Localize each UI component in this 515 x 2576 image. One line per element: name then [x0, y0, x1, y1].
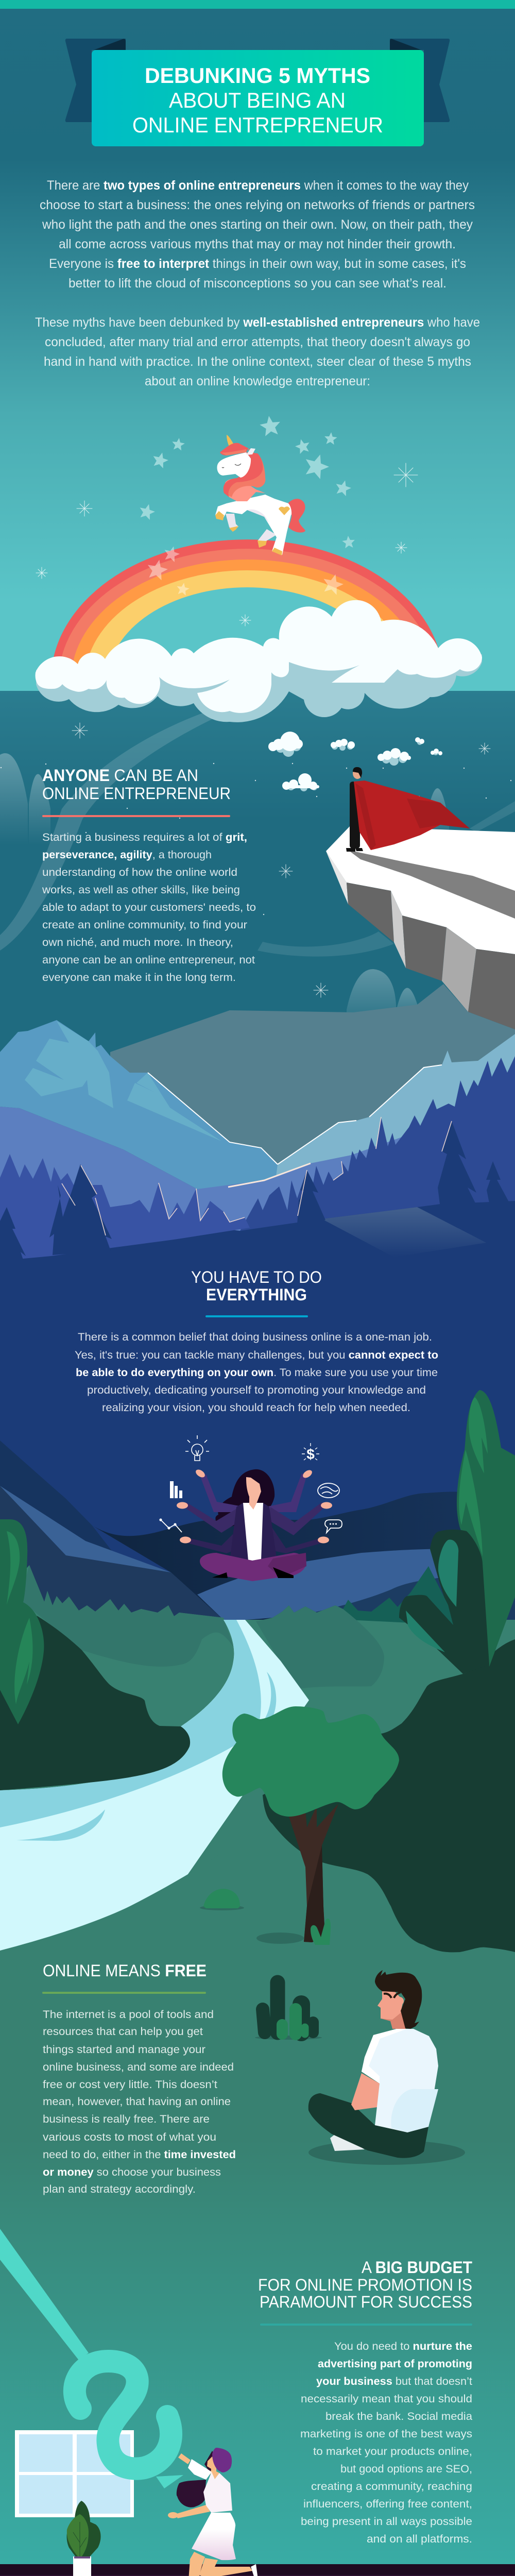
body text: Yes, it's true: you can tackle many challenges, but you cannot expect to	[75, 1349, 438, 1361]
intro text block: These myths have been debunked by well-established entrepreneurs who have	[35, 315, 480, 330]
heading: FOR ONLINE PROMOTION IS	[258, 2276, 472, 2294]
body text: There is a common belief that doing business online is a one-man job.	[78, 1331, 432, 1343]
section 1 text: anyone can be an online entrepreneur	[42, 766, 256, 984]
body text: but good options are SEO,	[340, 2463, 472, 2475]
body text: create an online community, to find your	[42, 919, 247, 931]
body text: You do need to nurture the	[334, 2341, 472, 2352]
title text: ABOUT BEING AN	[169, 88, 346, 112]
heading: ONLINE ENTREPRENEUR	[42, 784, 231, 803]
heading: YOU HAVE TO DO	[191, 1268, 322, 1286]
running woman	[168, 2448, 259, 2576]
cliff with hero	[326, 767, 515, 1029]
body text: works, as well as other skills, like being	[42, 884, 240, 896]
snow glints	[62, 1117, 452, 1235]
title banner	[65, 39, 450, 146]
intro text block: There are two types of online entrepreneurs when it comes to the way they	[47, 178, 469, 193]
top accent bar	[0, 0, 515, 9]
plant: left foliage	[0, 1519, 44, 1724]
mountain range	[0, 1020, 515, 1231]
body text: or money so choose your business	[43, 2166, 221, 2178]
body text: free or cost very little. This doesn’t	[43, 2079, 217, 2091]
body text: mean, however, that having an online	[43, 2096, 231, 2108]
sitting man	[308, 1970, 465, 2165]
main cloud	[35, 600, 482, 722]
hero with cape	[346, 767, 470, 852]
section 2 text: you have to do everything	[75, 1268, 438, 1414]
body text: be able to do everything on your own . To make sure you use your time	[76, 1367, 438, 1379]
body text: advertising part of promoting	[318, 2358, 472, 2370]
heading	[258, 2258, 472, 2311]
night hills	[0, 1440, 515, 1623]
intro text block: choose to start a business: the ones relying on networks of friends or partners	[40, 198, 475, 212]
heading: ONLINE MEANS FREE	[43, 1961, 207, 1980]
title text	[132, 63, 383, 137]
intro text block: about an online knowledge entrepreneur:	[145, 374, 370, 388]
hands	[177, 1468, 332, 1544]
faint rainbow reflection and hills	[0, 710, 515, 1036]
intro text block: better to lift the cloud of misconceptions so you can see what’s real.	[68, 276, 447, 291]
plateau behind mountains	[110, 984, 515, 1170]
body text: able to adapt to your customers' needs, to	[42, 902, 256, 913]
heading: PARAMOUNT FOR SUCCESS	[260, 2293, 472, 2311]
title text: DEBUNKING 5 MYTHS	[145, 63, 370, 88]
intro text block: hand in hand with practice. In the online context, steer clear of these 5 myths	[44, 354, 471, 369]
star dots	[1, 763, 511, 915]
background: navy section	[0, 1206, 515, 1628]
body text: creating a community, reaching	[311, 2481, 472, 2493]
background: lower sky	[0, 691, 515, 1206]
body text: things started and manage your	[43, 2044, 205, 2056]
body text: resources that can help you get	[43, 2026, 203, 2038]
body text: online business, and some are indeed	[43, 2061, 234, 2073]
heading	[191, 1268, 322, 1304]
tree	[222, 1706, 399, 1942]
heading: ANYONE CAN BE AN	[42, 766, 198, 785]
body text: being present in all ways possible	[301, 2516, 472, 2528]
body text: The internet is a pool of tools and	[43, 2009, 214, 2021]
body text: and on all platforms.	[367, 2533, 472, 2545]
meditating woman with icons	[159, 1435, 342, 1581]
section 4 text: big budget	[258, 2258, 472, 2545]
body text	[42, 832, 256, 984]
plant: right foliage	[399, 1390, 515, 1674]
body text: realizing your vision, you should reach for help when needed.	[102, 1402, 410, 1414]
hair	[215, 1469, 274, 1528]
upper arms	[200, 1475, 242, 1512]
body text: productively, dedicating yourself to promoting your knowledge and	[87, 1384, 426, 1396]
middle arms	[184, 1502, 242, 1533]
body text	[300, 2341, 472, 2545]
body text: need to do, either in the time invested	[43, 2149, 236, 2161]
small clouds	[268, 732, 442, 791]
bush: beside man	[255, 1982, 322, 2040]
background: sky gradient	[0, 0, 515, 691]
heading: EVERYTHING	[206, 1285, 307, 1304]
underline	[42, 815, 230, 817]
underline	[42, 1992, 206, 1994]
sky stars	[138, 414, 355, 549]
icon: dollar	[302, 1443, 319, 1462]
sparkles	[36, 463, 490, 1188]
intro text block: all come across various myths that may or may not hinder their growth.	[59, 237, 456, 251]
background: green section	[0, 1620, 515, 2565]
body text: break the bank. Social media	[325, 2411, 472, 2422]
icon: speech bubble	[325, 1520, 342, 1533]
dark forest right	[263, 1639, 515, 1952]
small bushes near tree	[200, 1889, 331, 1945]
body text: various costs to most of what you	[43, 2131, 216, 2143]
body text	[43, 2009, 236, 2195]
icon: brain	[318, 1483, 339, 1498]
body text	[75, 1331, 438, 1414]
intro text block: concluded, after many trial and error attempts, that theory doesn't always go	[45, 335, 470, 349]
rainbow	[51, 539, 443, 680]
body text: everyone can make it in the long term.	[42, 972, 236, 984]
background: dark purple room	[0, 2564, 515, 2576]
intro text block	[35, 178, 480, 388]
intro text block: who light the path and the ones starting on their own. Now, on their path, they	[42, 217, 473, 232]
body text: to market your products online,	[313, 2446, 472, 2458]
body text: plan and strategy accordingly.	[43, 2183, 196, 2195]
body text: own niché, and much more. In theory,	[42, 937, 233, 948]
crossed legs	[200, 1553, 305, 1581]
window	[15, 2430, 134, 2517]
icon: dollar: $	[306, 1446, 315, 1462]
icon: bars	[170, 1481, 182, 1498]
unicorn	[215, 435, 305, 555]
underline	[205, 1315, 308, 1317]
intro text block: Everyone is free to interpret things in their own way, but in some cases, it's	[49, 257, 466, 271]
icon: line chart	[159, 1518, 182, 1532]
section 3 text: online means free	[42, 1961, 236, 2195]
body text: necessarily mean that you should	[301, 2393, 472, 2405]
body text: business is really free. There are	[43, 2113, 210, 2125]
lower arms	[185, 1525, 242, 1553]
title text: ONLINE ENTREPRENEUR	[132, 113, 383, 137]
pine trees	[0, 1121, 511, 1260]
heading: A BIG BUDGET	[362, 2258, 472, 2277]
body text: perseverance, agility , a thorough	[42, 849, 212, 861]
body text: Starting a business requires a lot of grit,	[42, 832, 247, 843]
icon: light bulb	[185, 1435, 209, 1461]
green hills and far treelines	[0, 1565, 453, 1690]
forests	[0, 1056, 515, 1288]
body text: anyone can be an online entrepreneur, not	[42, 954, 255, 966]
body text: marketing is one of the best ways	[300, 2428, 472, 2440]
body text: your business but that doesn’t	[316, 2376, 472, 2387]
potted plant	[67, 2501, 101, 2576]
dark forest left	[0, 1602, 190, 1790]
body text: influencers, offering free content,	[303, 2498, 472, 2510]
river	[0, 1620, 515, 2009]
curly symbol pulled by woman	[0, 2229, 183, 2488]
heading	[42, 766, 231, 803]
body text: understanding of how the online world	[42, 867, 237, 878]
underline	[260, 2324, 472, 2326]
